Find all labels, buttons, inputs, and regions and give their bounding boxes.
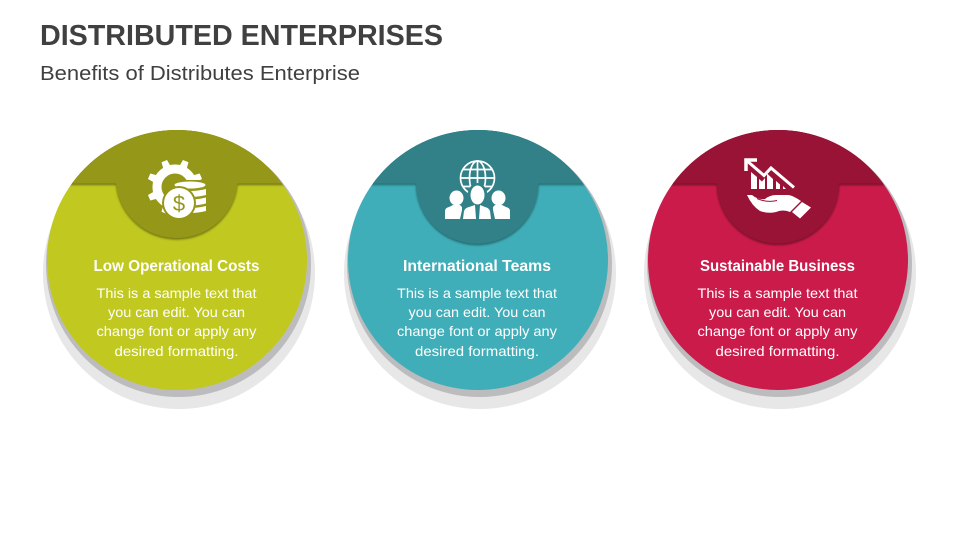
icon: gear with coins: $ — [173, 191, 185, 216]
panel: low operational costs — [30, 120, 320, 409]
subtitle: Benefits of Distributes Enterprise — [40, 63, 360, 85]
text block: This is a sample text that — [96, 285, 257, 301]
text block — [698, 285, 858, 359]
panel: international teams — [330, 120, 620, 409]
text block: change font or apply any — [96, 323, 256, 339]
icon: declining chart over hand — [746, 160, 811, 218]
title: DISTRIBUTED ENTERPRISES — [40, 20, 443, 52]
icon: gear with coins — [148, 160, 214, 222]
text block: change font or apply any — [698, 323, 858, 339]
text block: desired formatting. — [415, 343, 539, 359]
text block: This is a sample text that — [698, 285, 858, 301]
text block: This is a sample text that — [397, 285, 557, 301]
text block: you can edit. You can — [408, 304, 546, 320]
text block: desired formatting. — [114, 343, 238, 359]
text block: you can edit. You can — [108, 304, 245, 320]
text block: desired formatting. — [716, 343, 840, 359]
heading: Low Operational Costs — [94, 258, 260, 275]
panel: sustainable business — [630, 120, 920, 409]
text block: change font or apply any — [397, 323, 557, 339]
text block — [96, 285, 257, 359]
icon: globe with people — [445, 161, 510, 219]
text block: you can edit. You can — [709, 304, 846, 320]
text block — [397, 285, 557, 359]
heading: International Teams — [403, 258, 551, 275]
heading: Sustainable Business — [700, 258, 855, 275]
